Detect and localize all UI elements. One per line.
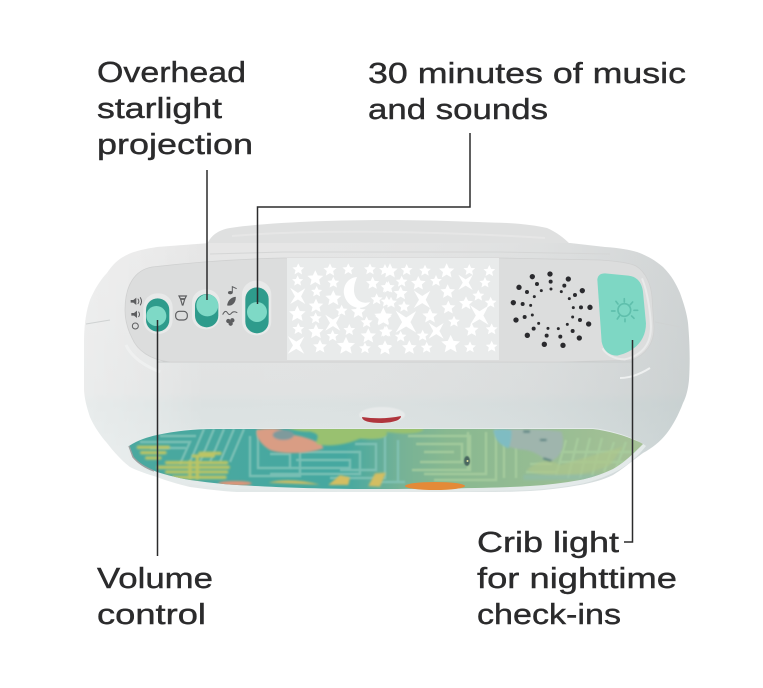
ferns — [138, 447, 228, 478]
device — [84, 220, 690, 492]
projection switch — [176, 289, 220, 329]
callout line: starlight projection — [206, 170, 208, 300]
callout line: crib light — [624, 340, 632, 542]
label: crib light: check-ins — [477, 599, 621, 631]
control panel — [125, 258, 654, 362]
device handle — [207, 220, 571, 245]
bottom motifs — [218, 481, 252, 486]
callout line: volume control — [156, 320, 158, 556]
orange motif — [405, 482, 465, 490]
maze pattern — [140, 429, 636, 482]
label: crib light: Crib light — [477, 527, 619, 559]
label: volume control — [97, 563, 213, 631]
label: 30 minutes of music and sounds: 30 minutes of music — [368, 58, 686, 90]
projection icons — [176, 296, 187, 320]
label: 30 minutes of music and sounds: and sounds — [368, 94, 548, 126]
infographic canvas — [84, 60, 690, 624]
crib light button — [597, 273, 651, 359]
device body — [84, 243, 690, 492]
label: overhead starlight projection: Overhead — [97, 57, 246, 89]
volume icons — [131, 298, 141, 329]
starlight projector window — [287, 258, 499, 360]
logo badge — [359, 407, 405, 423]
sound icons — [223, 287, 237, 325]
speaker holes — [511, 271, 593, 348]
label: crib light: for nighttime — [477, 563, 677, 595]
sun icon — [612, 299, 638, 322]
label: 30 minutes of music and sounds — [368, 58, 686, 126]
label: overhead starlight projection: starlight — [97, 93, 222, 125]
leaves — [287, 427, 424, 446]
volume switch — [131, 293, 173, 334]
sloth — [256, 428, 323, 453]
right animal — [509, 429, 564, 460]
label: crib light — [477, 527, 677, 631]
label: volume control: control — [97, 599, 206, 631]
label: volume control: Volume — [97, 563, 213, 595]
illustrated underside tray — [120, 425, 650, 492]
moon — [344, 277, 370, 308]
sound switch — [223, 281, 271, 335]
label: overhead starlight projection: projection — [97, 129, 253, 161]
callout line: music and sounds — [258, 133, 470, 304]
label: overhead starlight projection — [97, 57, 253, 161]
